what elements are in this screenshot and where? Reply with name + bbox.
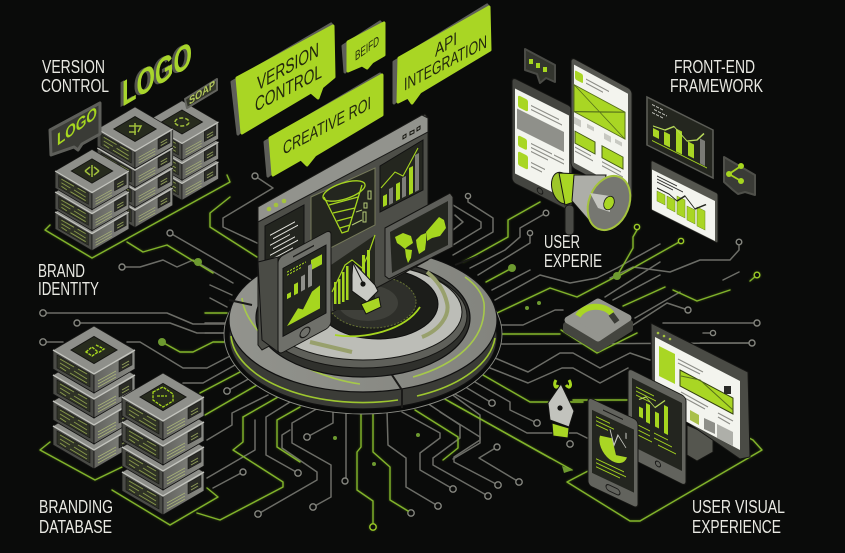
phone bars bbox=[287, 282, 298, 299]
megaphone bbox=[548, 170, 638, 236]
camera icon bbox=[724, 386, 731, 394]
lime banner bbox=[680, 370, 733, 414]
server stack: front bbox=[55, 149, 129, 251]
screen bbox=[515, 88, 569, 200]
lower lines bbox=[575, 147, 623, 177]
bottom right: tablet bbox=[628, 368, 686, 486]
home button bbox=[537, 187, 543, 195]
bar chart panel bbox=[380, 140, 423, 212]
label: user visual experience: EXPERIENCE bbox=[692, 517, 781, 537]
code lines bbox=[652, 104, 667, 120]
pie lines bbox=[610, 425, 626, 451]
gray image block bbox=[517, 108, 564, 152]
monitor body bbox=[651, 323, 750, 459]
well inner disc bbox=[328, 276, 416, 328]
monitor header bar bbox=[258, 115, 428, 222]
megaphone band bbox=[559, 173, 582, 205]
label: branding database: DATABASE bbox=[39, 517, 112, 537]
platform base bbox=[229, 265, 497, 409]
world map tablet bbox=[385, 193, 453, 279]
phone in front of monitor bbox=[278, 229, 331, 355]
screen bbox=[592, 410, 634, 493]
bottom right: pen nib bbox=[548, 380, 574, 438]
well core bbox=[338, 285, 398, 321]
lower growth chart panel bbox=[331, 235, 375, 310]
main dashboard monitor bbox=[258, 114, 428, 350]
light ring bbox=[264, 264, 462, 360]
world map bbox=[395, 217, 446, 263]
server stack: LOGO large bbox=[97, 107, 173, 228]
funnel bbox=[321, 177, 367, 233]
groove bbox=[256, 259, 470, 377]
platform halo ring bbox=[224, 254, 502, 414]
mid band bbox=[259, 264, 467, 368]
light ring arcs bbox=[310, 272, 448, 352]
header lines bbox=[586, 79, 609, 96]
speech bubble: creative ROI bbox=[265, 74, 382, 176]
home button bbox=[606, 483, 620, 496]
window dots bbox=[267, 199, 286, 211]
speech bubble: version control: CONTROL bbox=[255, 59, 322, 117]
megaphone driver bbox=[602, 195, 616, 211]
window controls bbox=[403, 126, 420, 139]
speech bubble: API integration: INTEGRATION bbox=[404, 32, 487, 96]
trend line bbox=[639, 388, 665, 412]
bottom right: desktop monitor bbox=[651, 323, 750, 461]
lime junction nodes bbox=[158, 258, 621, 473]
server stacks top left bbox=[55, 101, 218, 251]
label: version control: CONTROL bbox=[41, 76, 109, 96]
server stack: branding database left bbox=[53, 326, 135, 469]
funnel labels bbox=[352, 191, 371, 225]
megaphone throat bbox=[590, 193, 610, 212]
server stack: branding database right bbox=[122, 373, 204, 515]
label: front-end framework: FRAMEWORK bbox=[670, 76, 763, 96]
monitor stand bbox=[687, 425, 713, 461]
share speech bubble bbox=[724, 157, 755, 195]
phone gray bars bbox=[301, 264, 312, 292]
megaphone cone bbox=[572, 175, 606, 231]
wireframe image bbox=[574, 85, 625, 139]
label: user experience clipped: EXPERIE bbox=[544, 251, 602, 271]
label: brand identity: BRAND bbox=[38, 261, 85, 281]
bottom right: phone bbox=[588, 397, 638, 508]
small LOGO bubble: LOGO bbox=[57, 103, 97, 150]
SOAP tag: SOAP bbox=[189, 77, 215, 108]
pie chart bbox=[599, 432, 627, 468]
top lines bbox=[596, 417, 614, 433]
banner curve bbox=[681, 376, 733, 410]
gray circuit traces bbox=[40, 173, 760, 517]
label: brand identity: IDENTITY bbox=[38, 279, 99, 299]
outer ring lime arc bbox=[242, 277, 484, 384]
bars bbox=[653, 117, 694, 160]
text lines bbox=[531, 106, 564, 183]
monitor screen bbox=[655, 337, 740, 450]
white chart window bbox=[651, 160, 718, 244]
megaphone handle bbox=[565, 205, 574, 235]
home button bbox=[655, 460, 661, 468]
nib lime collar bbox=[361, 297, 381, 314]
well lime arc bbox=[335, 307, 420, 336]
label: user experience clipped: USER bbox=[544, 232, 580, 252]
label: branding database: BRANDING bbox=[39, 497, 113, 517]
central well bbox=[318, 269, 438, 339]
speech bubble: API integration: API bbox=[435, 28, 457, 62]
big 3D LOGO text bbox=[119, 34, 192, 116]
text lines bbox=[657, 176, 683, 195]
bars bbox=[639, 392, 668, 435]
speech bubble: small bbox=[343, 22, 384, 72]
nib hole bbox=[360, 281, 366, 287]
phone speaker bbox=[293, 246, 314, 257]
lime buttons bbox=[575, 131, 623, 169]
server stack: SOAP bbox=[146, 101, 218, 200]
monitor thumbnails bbox=[690, 410, 699, 425]
central platform bbox=[224, 248, 502, 414]
bars bbox=[657, 186, 705, 230]
baseline bbox=[652, 140, 707, 168]
speaker bbox=[603, 410, 623, 419]
label: front-end framework: FRONT-END bbox=[674, 57, 755, 77]
lime blocks bbox=[518, 95, 528, 170]
phone home button bbox=[300, 325, 310, 340]
server stacks bottom left bbox=[53, 326, 204, 515]
label: user visual experience: USER VISUAL bbox=[692, 497, 785, 517]
platform top surface bbox=[229, 248, 497, 392]
lime square bbox=[575, 70, 583, 83]
bottom lines bbox=[596, 459, 626, 481]
phone text lines bbox=[287, 262, 306, 275]
screen bbox=[652, 170, 715, 241]
label: version control: VERSION bbox=[42, 57, 105, 77]
bottom right: pad device bbox=[566, 302, 630, 349]
speech bubble: version control: VERSION bbox=[257, 37, 319, 96]
big 3D LOGO text: LOGO bbox=[122, 34, 192, 115]
right cluster: tablet two bbox=[571, 57, 632, 200]
speech bubble: small: BEIFD bbox=[355, 33, 379, 65]
trend line bbox=[653, 108, 704, 152]
lime circuit traces bbox=[40, 175, 762, 530]
gray bar bbox=[700, 138, 705, 166]
lime sidebar bbox=[659, 346, 675, 384]
top lines bbox=[636, 387, 656, 405]
bottom lines bbox=[636, 424, 676, 454]
trend line bbox=[657, 180, 706, 216]
right cluster: tablet one bbox=[512, 77, 572, 212]
phone lime tile bbox=[311, 254, 322, 270]
small LOGO bubble bbox=[50, 103, 100, 155]
megaphone back bbox=[548, 170, 576, 206]
speech bubble: creative ROI: CREATIVE ROI bbox=[283, 93, 371, 160]
monitor window dots bbox=[657, 332, 671, 340]
code panel bbox=[265, 205, 304, 326]
nib slit bbox=[353, 263, 363, 283]
thumbnails bbox=[574, 117, 622, 150]
pen nib center bbox=[352, 262, 381, 314]
front-end chart panel bbox=[647, 97, 713, 178]
screen bbox=[632, 378, 682, 471]
dots speech bubble bbox=[525, 49, 555, 83]
screen bbox=[574, 65, 628, 192]
platform segment cuts bbox=[229, 256, 478, 408]
funnel panel bbox=[311, 168, 375, 258]
monitor text lines bbox=[678, 359, 733, 424]
big 3D LOGO text: LOGO bbox=[119, 35, 189, 116]
phone area chart bbox=[287, 285, 320, 326]
phone screen bbox=[283, 245, 326, 336]
platform side lime band bbox=[231, 336, 495, 403]
speech bubble: API integration bbox=[394, 5, 490, 103]
speech bubble: version control bbox=[232, 24, 334, 134]
nib glow wings bbox=[555, 380, 570, 387]
megaphone bell bbox=[580, 170, 638, 236]
rear slab behind phone bbox=[258, 257, 278, 352]
